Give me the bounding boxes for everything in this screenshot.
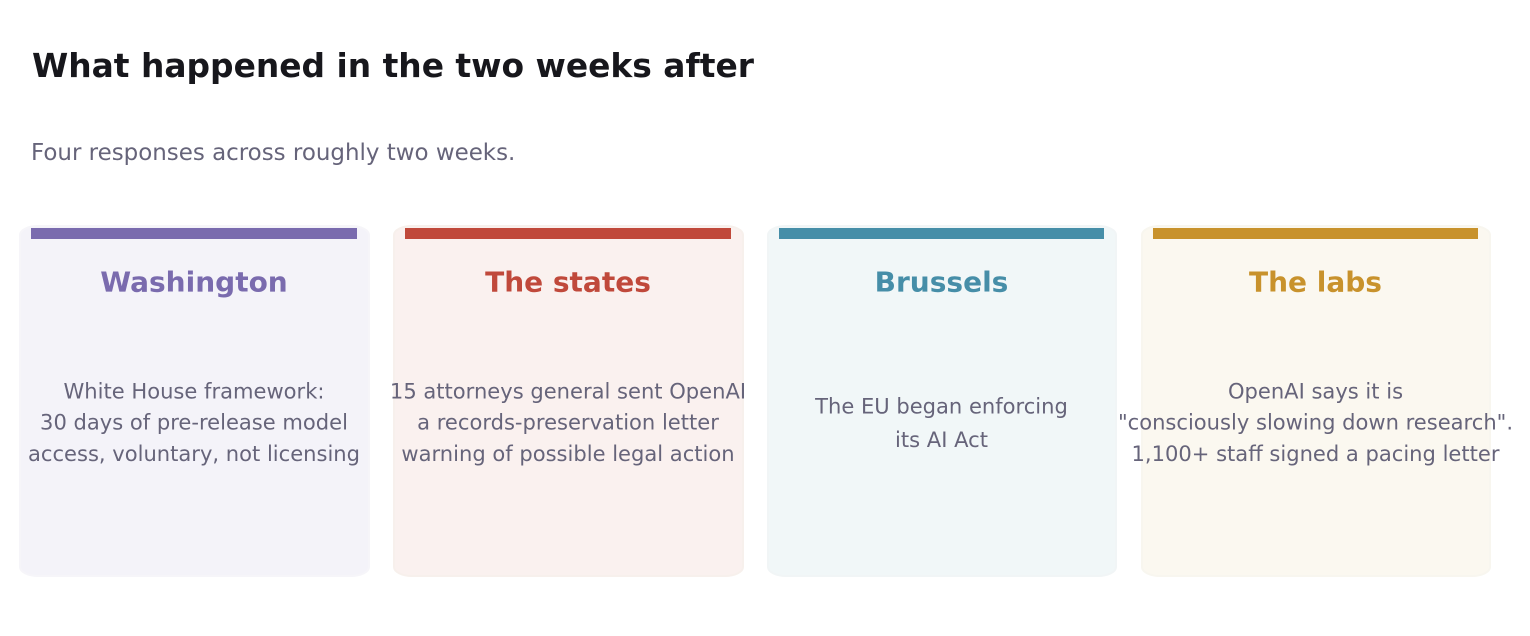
text: Brussels: its AI Act: [895, 427, 988, 452]
title: What happened in the two weeks after: [32, 46, 755, 85]
text: The labs: [1118, 378, 1513, 466]
heading: Washington: Washington: [100, 266, 288, 298]
text: Brussels: [814, 394, 1068, 452]
text: The labs: "consciously slowing down research".: [1118, 410, 1513, 434]
text: The labs: OpenAI says it is: [1228, 378, 1403, 404]
accent bar: Brussels: [779, 228, 1104, 239]
text: Brussels: The EU began enforcing: [814, 394, 1068, 418]
accent bar: Washington: [31, 228, 357, 239]
panel: The states: [390, 226, 746, 576]
text: The labs: 1,100+ staff signed a pacing letter: [1132, 441, 1500, 466]
text: Washington: White House framework:: [64, 378, 324, 404]
text: The states: warning of possible legal action: [401, 441, 735, 466]
accent bar: The labs: [1153, 228, 1478, 239]
text: The states: a records-preservation letter: [417, 410, 719, 434]
text: Washington: access, voluntary, not licensing: [28, 441, 360, 466]
panel: Brussels: [768, 226, 1116, 576]
subtitle: Four responses across roughly two weeks.: [31, 140, 515, 166]
heading: Brussels: Brussels: [875, 266, 1008, 298]
text: Washington: 30 days of pre-release model: [40, 410, 348, 434]
heading: The labs: The labs: [1249, 266, 1382, 298]
heading: The states: The states: [485, 266, 651, 298]
panel: The labs: [1118, 226, 1513, 576]
text: Washington: [28, 378, 360, 466]
text: The states: [390, 378, 746, 466]
text: The states: 15 attorneys general sent OpenAI: [390, 378, 746, 404]
accent bar: The states: [405, 228, 731, 239]
panel: Washington: [20, 226, 369, 576]
